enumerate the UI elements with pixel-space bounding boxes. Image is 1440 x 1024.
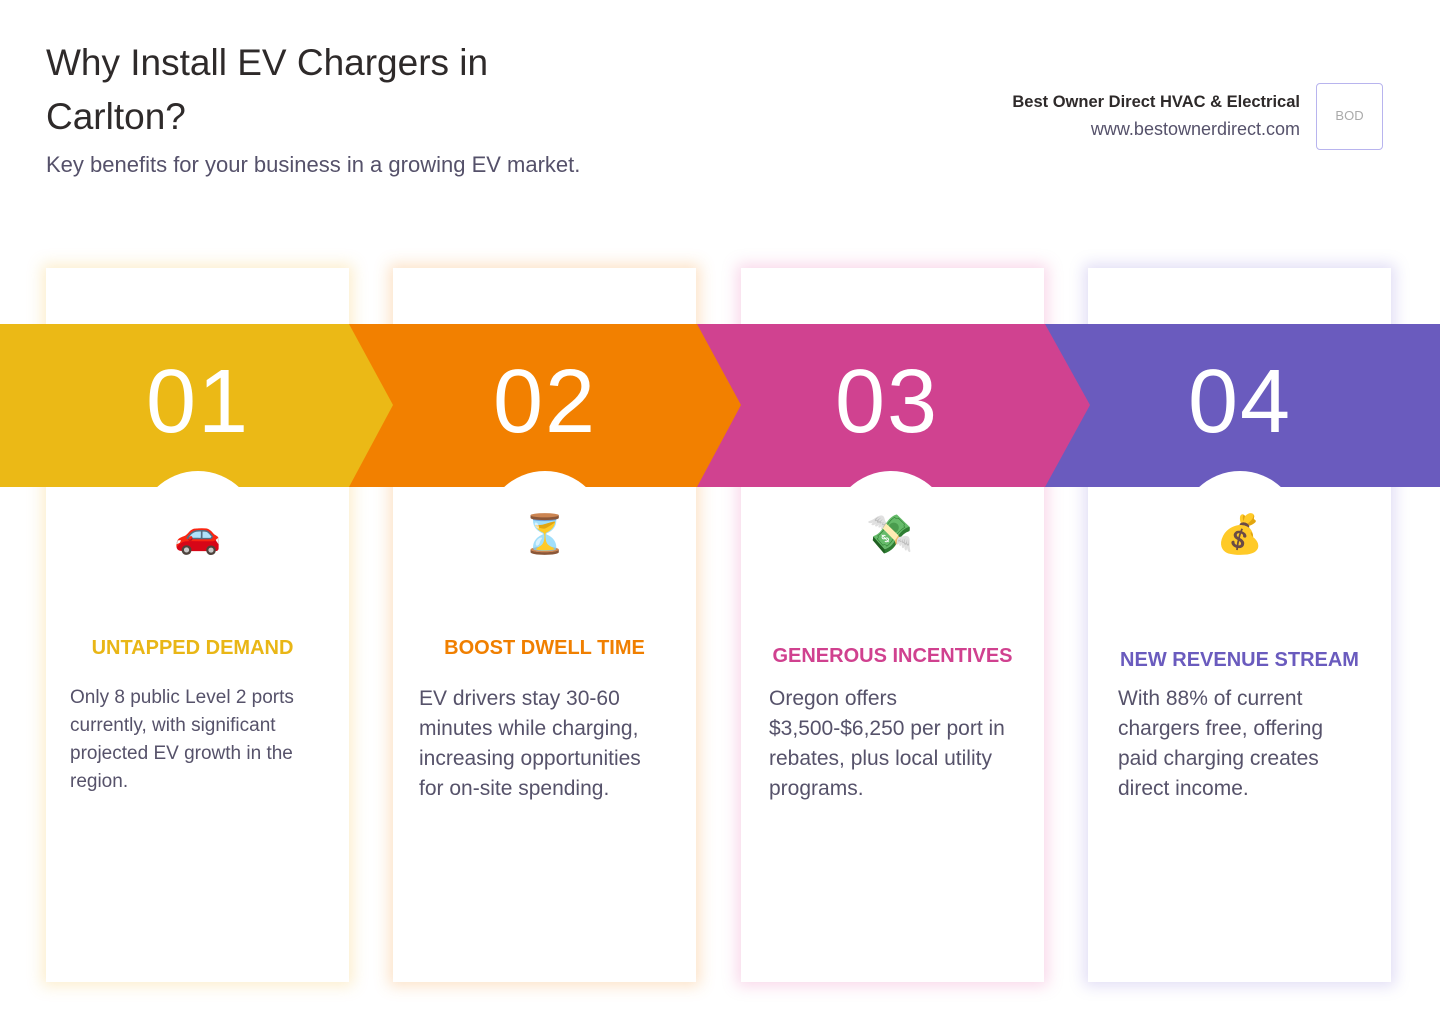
card 1 text — [70, 637, 294, 792]
text: EV drivers stay 30-60 minutes while charging, increasing opportunities for on-site spending. — [419, 687, 641, 800]
icon: money bag: 💰 — [1216, 513, 1264, 557]
icon: hourglass: ⏳ — [521, 513, 569, 557]
subtitle: Key benefits for your business in a growing EV market. — [46, 152, 580, 177]
text: NEW REVENUE STREAM — [1120, 649, 1359, 671]
icon: money wings: 💸 — [866, 513, 914, 557]
text: GENEROUS INCENTIVES — [772, 645, 1013, 667]
banner arrows — [0, 324, 1440, 487]
card 3 — [741, 268, 1044, 982]
text: Oregon offers $3,500-$6,250 per port in rebates, plus local utility programs. — [769, 687, 1005, 800]
number 03: 03 — [835, 352, 939, 452]
card 1 — [46, 268, 349, 982]
card 2 text — [419, 637, 645, 800]
number 01: 01 — [146, 352, 250, 452]
company url: www.bestownerdirect.com — [1091, 119, 1300, 139]
card 4 — [1088, 268, 1391, 982]
company name: Best Owner Direct HVAC & Electrical — [1012, 93, 1300, 111]
number 04: 04 — [1188, 352, 1292, 452]
icon: car: 🚗 — [174, 513, 222, 557]
title: Why Install EV Chargers in Carlton? — [46, 42, 488, 137]
text: With 88% of current chargers free, offering paid charging creates direct income. — [1118, 687, 1323, 800]
text: Only 8 public Level 2 ports currently, with significant projected EV growth in the region. — [70, 687, 294, 792]
card 4 text — [1118, 649, 1359, 800]
card 2 — [393, 268, 696, 982]
number 02: 02 — [493, 352, 597, 452]
text: UNTAPPED DEMAND — [92, 637, 293, 659]
logo — [1316, 83, 1383, 150]
text: BOOST DWELL TIME — [444, 637, 645, 659]
card 3 text — [769, 645, 1013, 800]
logo: BOD — [1335, 108, 1364, 123]
